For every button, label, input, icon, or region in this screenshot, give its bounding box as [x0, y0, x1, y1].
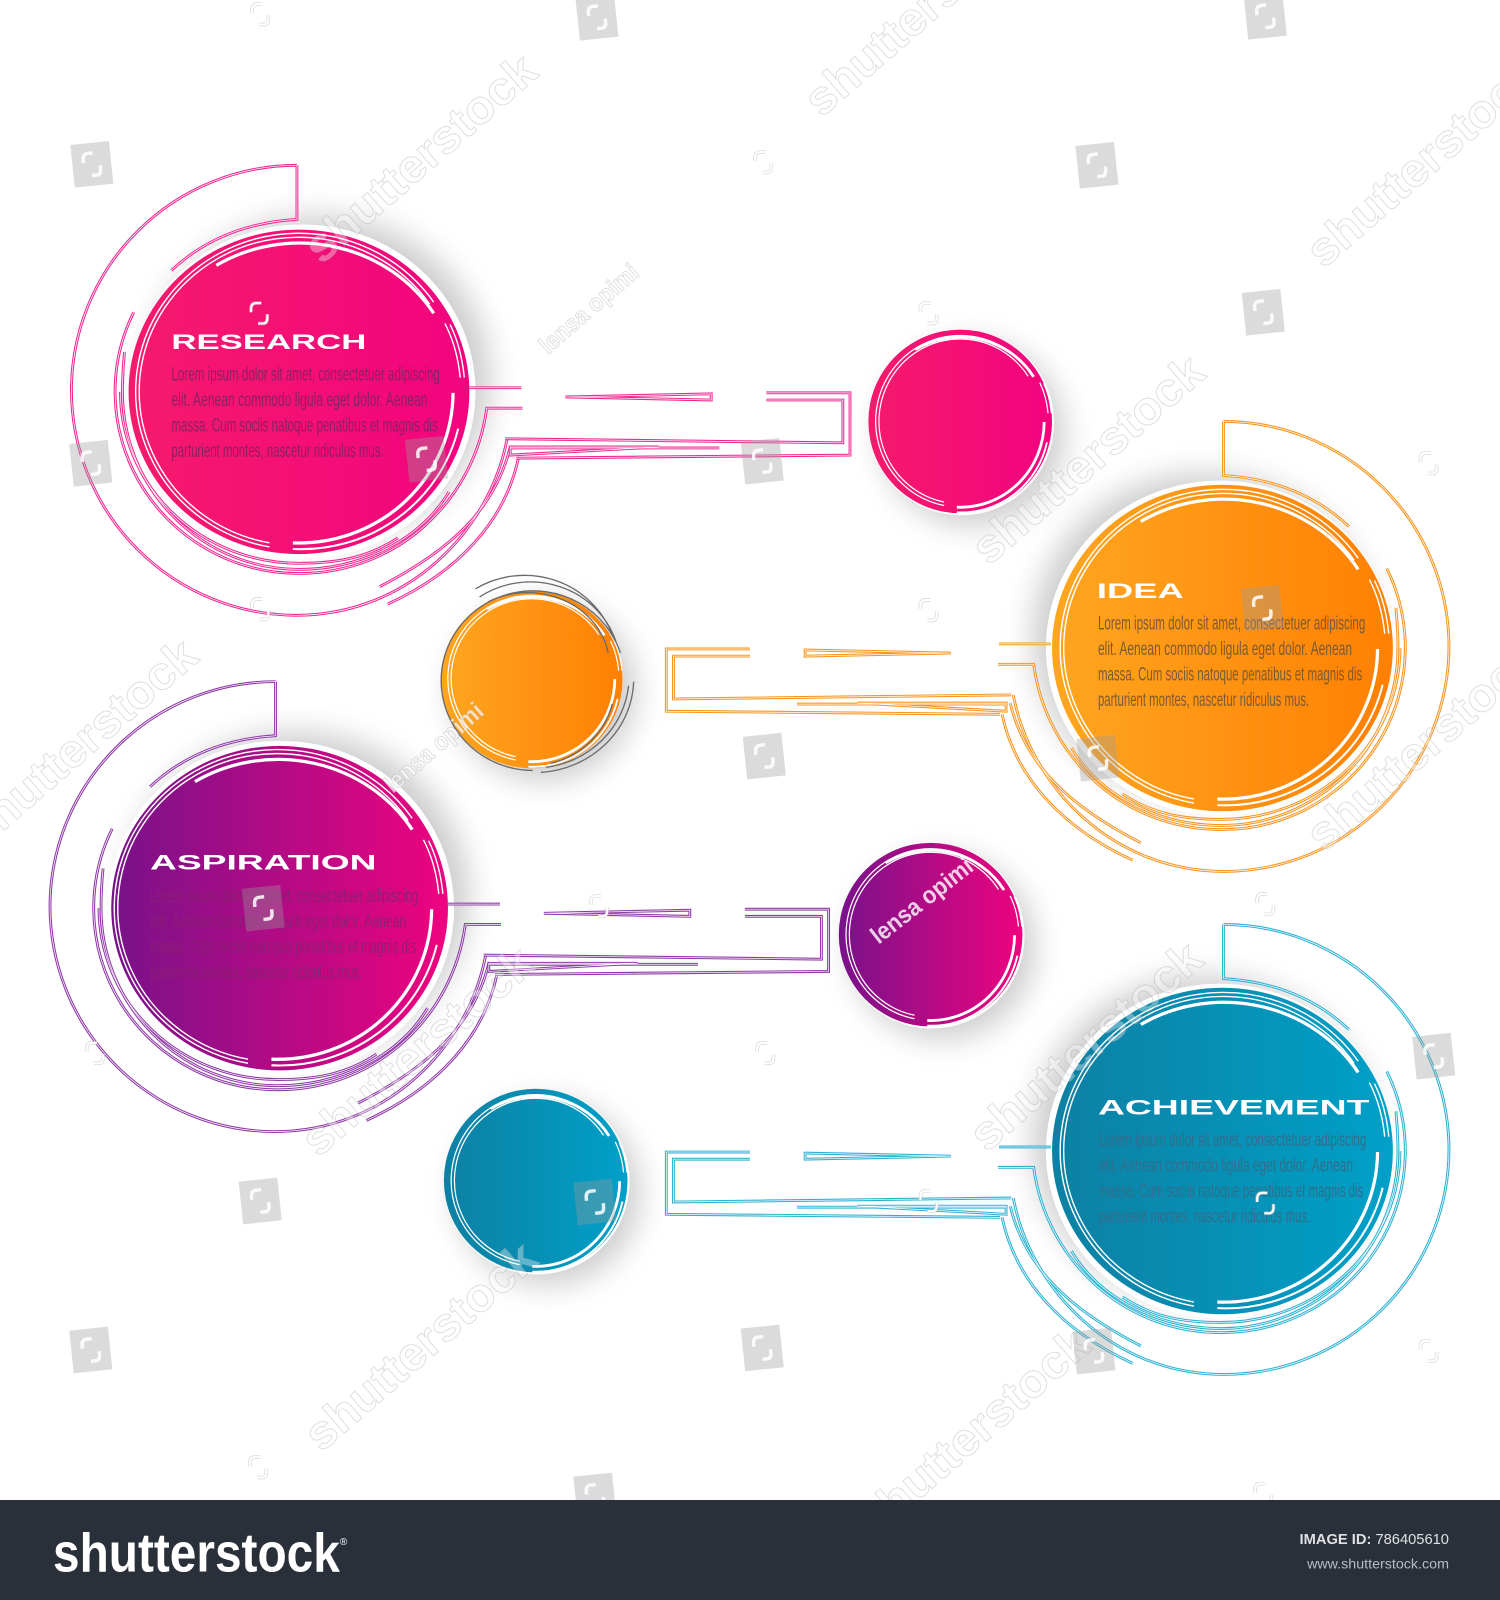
- watermark text: shutterstock: [959, 931, 1213, 1161]
- achievement shadow: [1033, 977, 1376, 1303]
- idea heading: IDEA: [1097, 579, 1184, 603]
- aspiration circle: [111, 746, 448, 1070]
- idea body text: parturient montes, nascetur ridiculus mus.: [1098, 689, 1309, 711]
- aspiration body text: elit. Aenean commodo ligula eget dolor. Aenean: [150, 911, 406, 933]
- research circle: [129, 230, 469, 554]
- idea white arcs: [1060, 489, 1389, 805]
- research body text: massa. Cum sociis natoque penatibus et magnis dis: [171, 415, 438, 437]
- panel: research: [71, 165, 850, 615]
- achievement rim: [1046, 984, 1393, 1318]
- panel: idea: [666, 421, 1449, 871]
- footer website: www.shutterstock.com: [1306, 1556, 1449, 1572]
- research body text: elit. Aenean commodo ligula eget dolor. Aenean: [171, 389, 428, 411]
- panel: aspiration: [50, 682, 829, 1132]
- aspiration body text: [150, 885, 418, 984]
- small circle: research: [868, 330, 1064, 526]
- aspiration shadow: [126, 733, 468, 1059]
- aspiration body text: Lorem ipsum dolor sit amet, consectetuer adipiscing: [150, 885, 418, 907]
- aspiration line work: [50, 682, 501, 1132]
- achievement circle: [1052, 988, 1393, 1314]
- small circle: idea: [441, 575, 636, 781]
- research body text: Lorem ipsum dolor sit amet, consectetuer adipiscing: [171, 364, 440, 386]
- watermark text: shutterstock: [847, 1316, 1100, 1546]
- watermark text: shutterstock: [291, 936, 544, 1166]
- aspiration heading: ASPIRATION: [150, 850, 377, 874]
- research body text: parturient montes, nascetur ridiculus mus.: [171, 440, 384, 462]
- aspiration body text: parturient montes, nascetur ridiculus mus.: [150, 962, 362, 984]
- idea line work: [998, 421, 1449, 871]
- small circle: achievement: [444, 1089, 640, 1285]
- achievement white arcs: [1060, 992, 1389, 1308]
- research connector: [505, 393, 850, 458]
- footer registered mark: ®: [340, 1537, 348, 1548]
- achievement line work: [998, 924, 1449, 1374]
- aspiration white arcs: [114, 750, 443, 1066]
- idea connector: [666, 649, 1011, 714]
- idea body text: elit. Aenean commodo ligula eget dolor. Aenean: [1098, 638, 1352, 660]
- watermark text: shutterstock: [294, 43, 547, 273]
- research body text: [171, 364, 440, 462]
- watermark text: lensa opimi: [379, 698, 489, 798]
- aspiration rim: [107, 741, 454, 1076]
- achievement body text: [1099, 1129, 1366, 1227]
- idea circle: [1052, 485, 1393, 811]
- research shadow: [147, 216, 490, 543]
- idea shadow: [1033, 473, 1376, 800]
- footer band: [0, 1500, 1500, 1600]
- achievement body text: parturient montes, nascetur ridiculus mus.: [1099, 1205, 1310, 1227]
- watermark text: shutterstock: [961, 344, 1215, 574]
- small circle: aspiration: [839, 843, 1035, 1039]
- watermark text: shutterstock: [294, 1231, 547, 1461]
- footer image id: IMAGE ID: 786405610: [1300, 1532, 1449, 1548]
- idea body text: [1098, 613, 1365, 711]
- idea rim: [1046, 481, 1393, 815]
- watermark text: lensa opimi: [534, 259, 644, 360]
- achievement connector: [666, 1152, 1011, 1217]
- research heading: RESEARCH: [171, 330, 366, 354]
- research rim: [129, 224, 476, 559]
- watermark text: lensa opimi: [866, 853, 979, 950]
- aspiration connector: [484, 909, 829, 974]
- research white arcs: [136, 233, 464, 549]
- aspiration body text: massa. Cum sociis natoque penatibus et magnis dis: [150, 936, 416, 958]
- achievement heading: ACHIEVEMENT: [1098, 1095, 1369, 1119]
- footer logo: shutterstock: [53, 1521, 340, 1583]
- research line work: [71, 165, 522, 615]
- panel: achievement: [666, 924, 1449, 1374]
- achievement body text: elit. Aenean commodo ligula eget dolor. Aenean: [1099, 1154, 1353, 1176]
